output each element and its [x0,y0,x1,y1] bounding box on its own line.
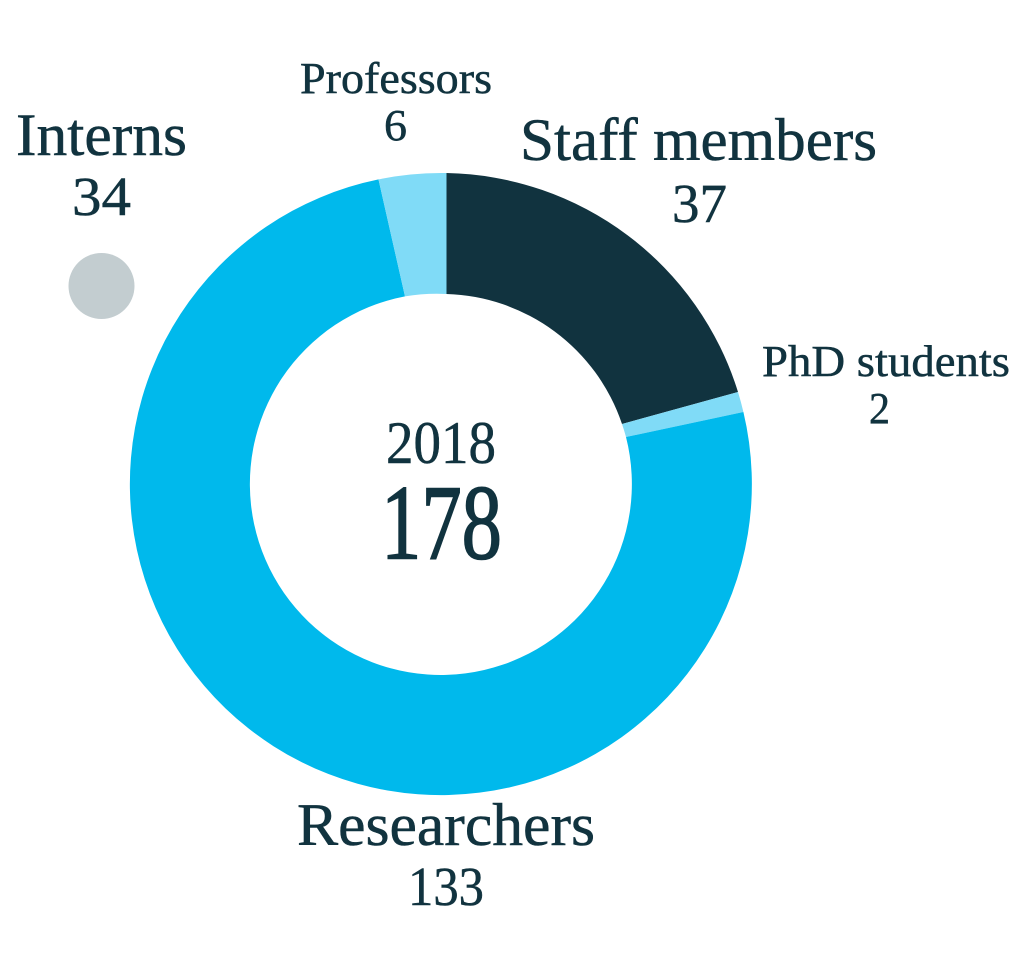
segment: professors [378,173,446,296]
label: interns: Interns [16,102,187,168]
label: staff members [520,107,877,234]
center label: year and total [381,410,502,582]
segment: researchers [130,179,752,795]
label: interns: 34 [72,166,131,227]
segment: staff members [446,173,738,424]
label: professors: Professors [300,54,492,103]
label: researchers [297,792,595,917]
label: researchers: 133 [408,856,484,917]
label: PhD students: 2 [869,384,890,433]
label: staff members: Staff members [520,107,877,173]
label: PhD students: PhD students [762,337,1010,386]
label: professors: 6 [384,101,407,150]
label: interns [16,102,187,227]
total: 178 [381,464,502,582]
segment: PhD students [622,392,743,437]
label: researchers: Researchers [297,792,595,858]
year: 2018 [386,410,496,476]
label: staff members: 37 [672,173,727,234]
icon: interns grey dot [68,253,134,319]
donut chart [130,173,752,795]
label: PhD students [762,337,1010,433]
label: professors [300,54,492,150]
